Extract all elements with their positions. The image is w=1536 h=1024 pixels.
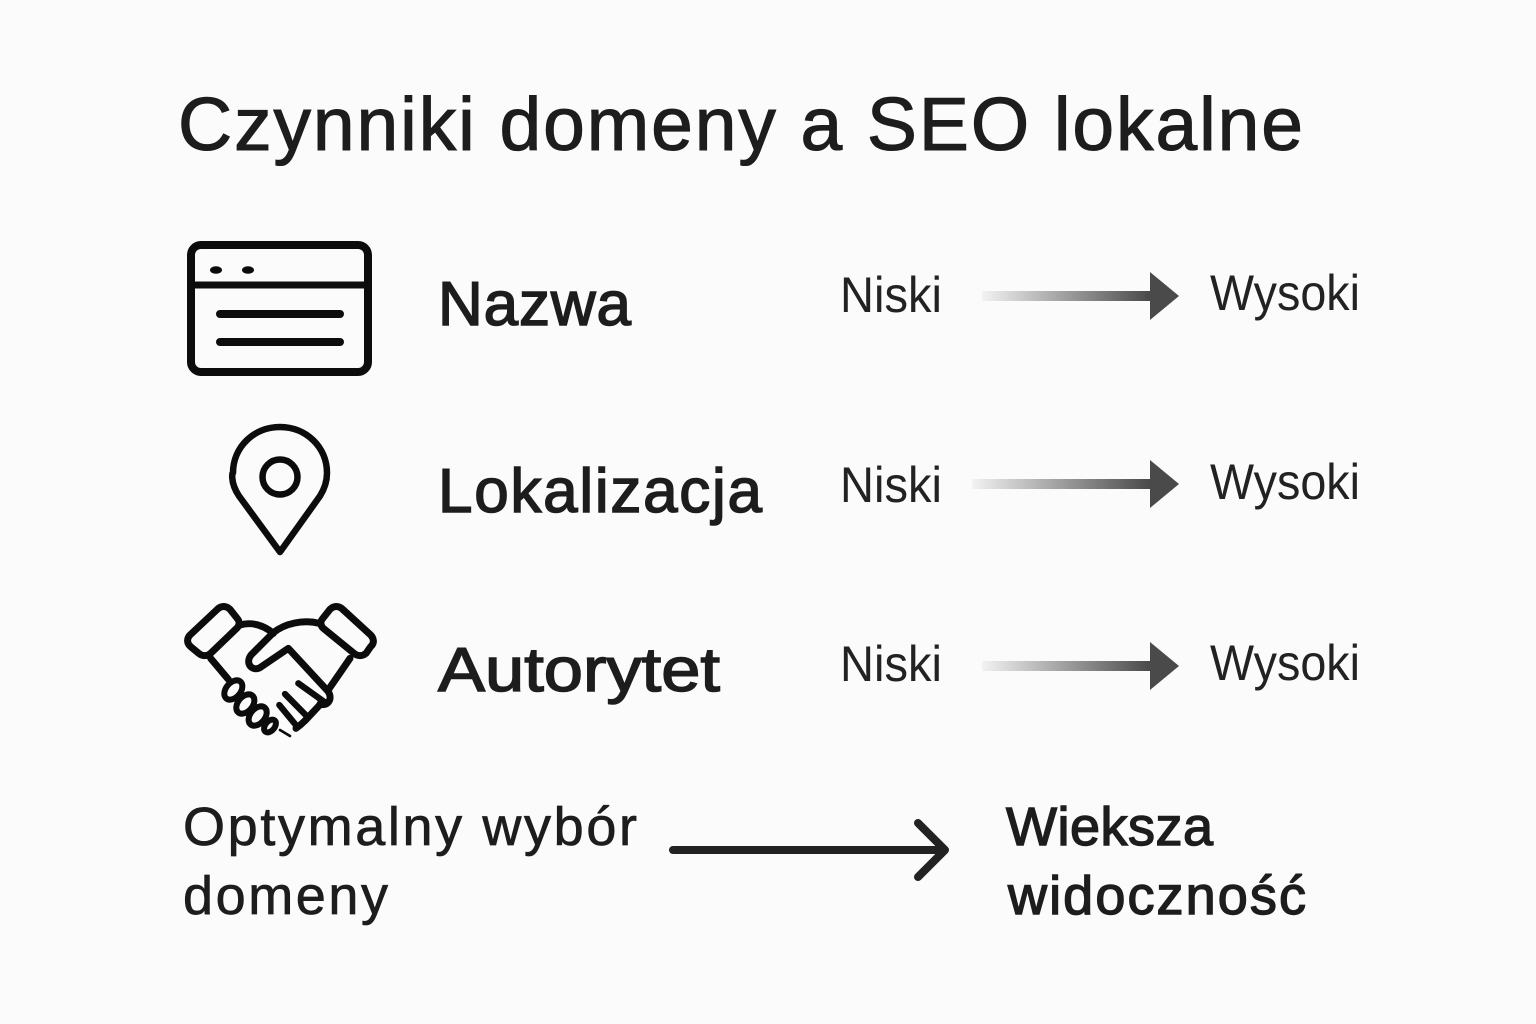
label: Niski: Niski: [840, 636, 942, 692]
conclusion: domain choice: [183, 797, 637, 926]
conclusion: greater visibility: [1006, 797, 1306, 926]
arrow: low to high: [982, 642, 1179, 690]
label: Autorytet: Autorytet: [438, 636, 720, 705]
label: Lokalizacja: Lokalizacja: [438, 457, 763, 526]
label: Wysoki: Wysoki: [1210, 454, 1360, 510]
row: Autorytet: [188, 607, 1360, 736]
title: Czynniki domeny a SEO lokalne: [178, 82, 1303, 166]
label: Niski: Niski: [840, 267, 942, 323]
arrow: low to high: [972, 460, 1179, 508]
row: Lokalizacja: [232, 427, 1360, 552]
conclusion: greater visibility: Wieksza: [1006, 797, 1214, 857]
arrow: low to high: [982, 272, 1179, 320]
label: Niski: Niski: [840, 457, 942, 513]
label: Wysoki: Wysoki: [1210, 635, 1360, 691]
row: Nazwa: [191, 245, 1360, 372]
conclusion: domain choice: Optymalny wybór: [183, 797, 637, 857]
label: Wysoki: Wysoki: [1210, 265, 1360, 321]
conclusion: domain choice: domeny: [183, 866, 388, 926]
icon: map pin: [232, 427, 327, 552]
conclusion: greater visibility: widoczność: [1007, 866, 1306, 926]
icon: browser window: [191, 245, 368, 372]
arrow: result: [673, 823, 945, 877]
icon: handshake: [188, 607, 373, 736]
label: Nazwa: Nazwa: [438, 270, 632, 339]
